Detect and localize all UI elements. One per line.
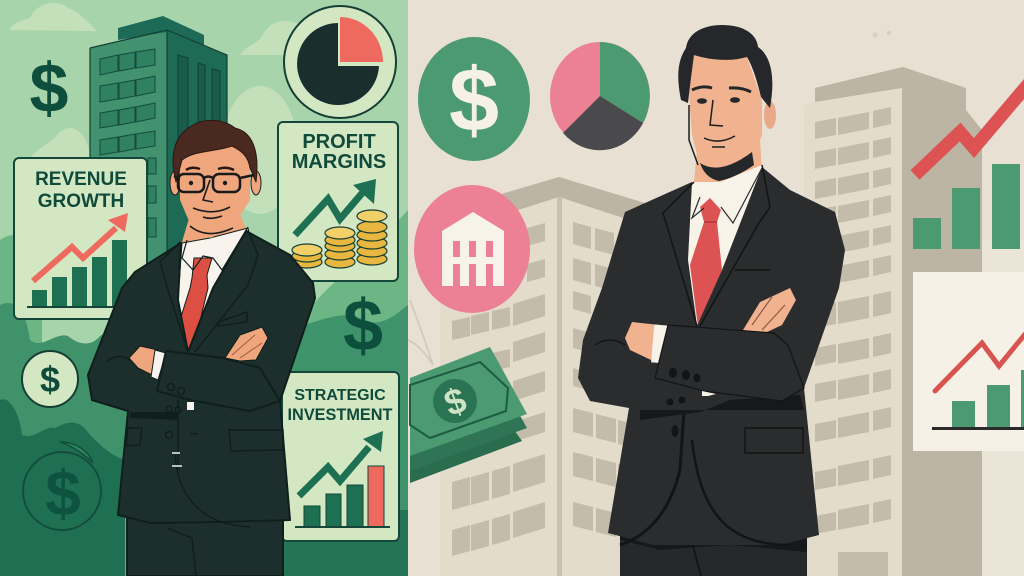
tie <box>180 258 212 351</box>
chart: tri-color pie <box>550 42 650 150</box>
trousers <box>620 540 807 576</box>
folded forearm <box>157 351 280 411</box>
chart: investment bars <box>304 466 384 527</box>
building: green tower <box>89 16 228 262</box>
jacket <box>88 231 315 523</box>
face <box>689 55 762 153</box>
card: revenue growth <box>14 158 147 319</box>
right hand <box>225 327 268 361</box>
chart: pie badge <box>284 6 396 118</box>
hair <box>678 25 772 108</box>
icon: large dollar coin: $ <box>45 457 81 529</box>
glasses <box>174 174 254 192</box>
collar lines <box>692 168 762 223</box>
left hand <box>625 322 660 360</box>
shirt <box>688 165 762 306</box>
card: strategic investment: STRATEGIC <box>294 387 386 404</box>
chart: red arrow with green bars <box>913 82 1024 249</box>
chart: revenue bars <box>27 240 130 308</box>
card: profit margins <box>278 122 398 281</box>
card: revenue growth: GROWTH <box>38 191 124 212</box>
arrow: profit trend <box>295 191 364 235</box>
building: left tower <box>408 177 660 576</box>
icon: dollar sign top left: $ <box>30 49 68 127</box>
icon: stack of banknotes <box>410 347 527 483</box>
shirt <box>178 228 252 352</box>
collar lines <box>182 227 248 270</box>
icon: large dollar coin <box>23 442 101 530</box>
neck <box>182 215 248 262</box>
background: clouds and hills <box>0 3 408 576</box>
card: strategic investment: INVESTMENT <box>288 406 393 424</box>
icon: green dollar circle: $ <box>449 51 499 151</box>
face <box>180 145 250 238</box>
card: revenue growth: REVENUE <box>35 169 127 190</box>
card: profit margins: PROFIT <box>302 131 376 153</box>
hair <box>173 120 257 182</box>
panel: right beige side <box>408 0 1024 576</box>
ears <box>170 171 180 195</box>
tie <box>690 198 722 326</box>
folded forearm <box>655 325 804 401</box>
arrow: investment trend <box>299 447 369 496</box>
icon: small dollar badge <box>22 351 78 407</box>
icon: green dollar circle <box>418 37 530 161</box>
card: strategic investment <box>282 372 399 541</box>
right hand <box>743 288 796 333</box>
icon: coin stacks <box>292 210 387 268</box>
jacket <box>578 167 845 545</box>
icon: pink building circle <box>414 185 530 313</box>
panel: left green side <box>0 0 408 576</box>
chart: white board with trend line <box>913 272 1024 451</box>
left hand <box>129 346 158 375</box>
icon: small dollar badge: $ <box>40 359 60 400</box>
icon: stack of banknotes: $ <box>439 379 472 424</box>
figure: man with glasses, left <box>88 120 315 576</box>
card: profit margins: MARGINS <box>292 151 386 173</box>
ears and neck <box>764 101 776 129</box>
icon: dollar sign right: $ <box>343 286 383 366</box>
trousers <box>127 518 283 576</box>
building: right tower <box>815 67 982 576</box>
arrow: revenue trend <box>33 228 116 281</box>
figure: man in dark suit, right <box>578 25 845 576</box>
